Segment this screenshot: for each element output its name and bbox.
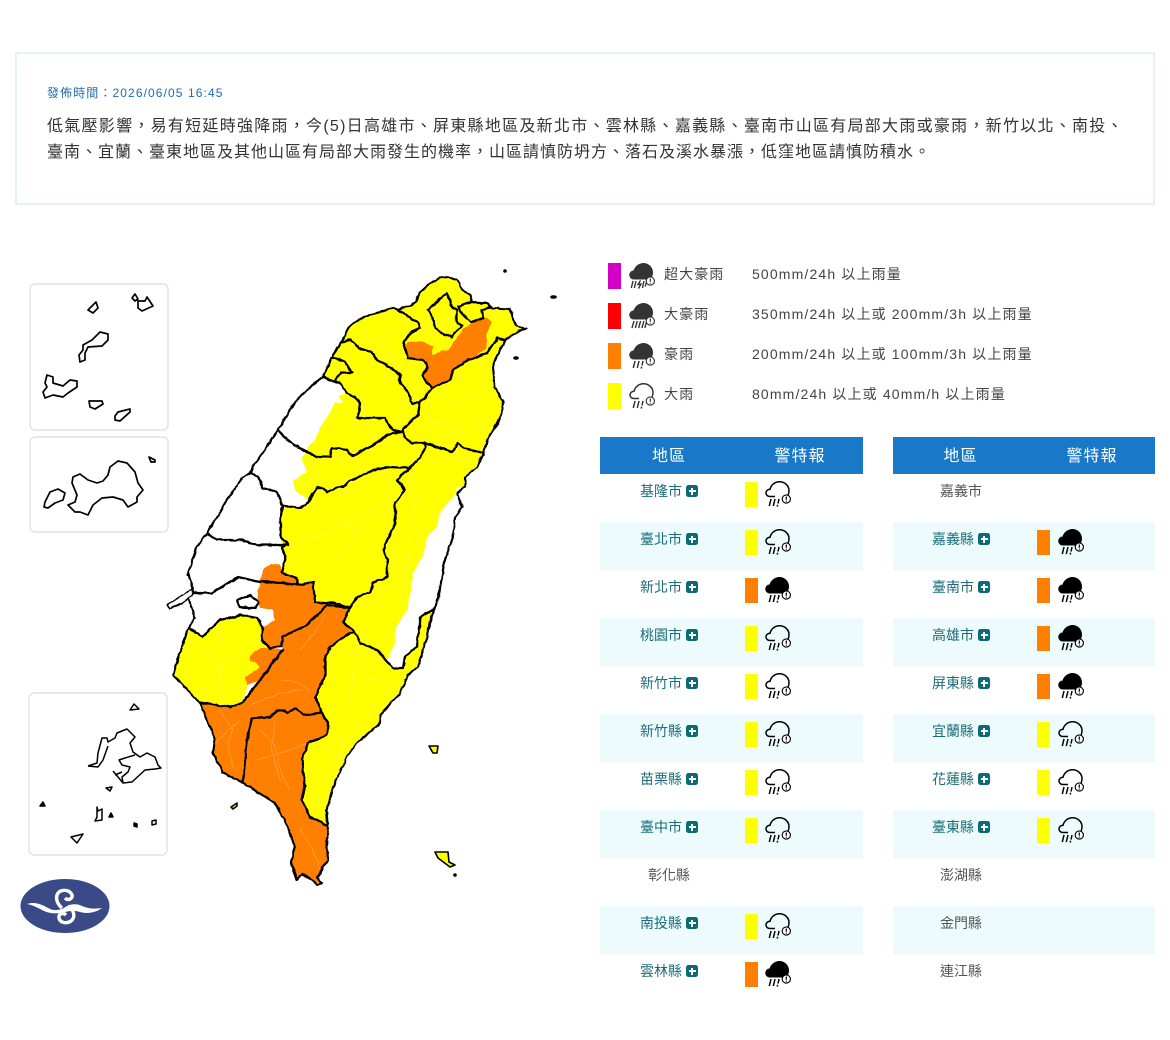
row: 連江縣: 連江縣 xyxy=(940,963,982,979)
row: 金門縣 xyxy=(893,906,1155,954)
panel: announcement box xyxy=(15,52,1155,205)
row: 新北市: 新北市 xyxy=(640,579,682,595)
table header: right: 地區 xyxy=(943,448,978,465)
row: 臺東縣: 臺東縣 xyxy=(932,819,974,835)
table header: left: 地區 xyxy=(652,448,686,465)
row: 屏東縣: 屏東縣 xyxy=(932,675,974,691)
row: 新竹縣: 新竹縣 xyxy=(640,723,682,739)
row: 臺北市 xyxy=(600,522,863,570)
row: 南投縣 xyxy=(600,906,863,954)
region: orange Tainan mountains xyxy=(245,648,283,685)
legend xyxy=(608,263,1033,409)
row: 新竹市: 新竹市 xyxy=(640,675,682,691)
legend: extremely heavy rain: 豪雨 xyxy=(664,346,694,362)
warning message text xyxy=(47,117,1124,161)
table header: left xyxy=(600,437,863,474)
warning message text: 低氣壓影響，易有短延時強降雨，今(5)日高雄市、屏東縣地區及新北市、雲林縣、嘉義縣、臺南市山區有局部大雨或豪雨，新竹以北、南投、 xyxy=(47,118,1124,135)
row: 苗栗縣: 苗栗縣 xyxy=(640,771,682,787)
row: 宜蘭縣: 宜蘭縣 xyxy=(932,723,974,739)
row: 高雄市: 高雄市 xyxy=(932,627,974,643)
row: 新竹縣 xyxy=(600,714,863,762)
legend: heavy rain xyxy=(608,383,1006,409)
region: yellow Taitung xyxy=(302,610,433,825)
table header: left: 警特報 xyxy=(774,448,826,465)
row: 臺中市: 臺中市 xyxy=(640,819,682,835)
legend: extremely torrential rain: 超大豪雨 xyxy=(664,266,724,282)
row: 花蓮縣: 花蓮縣 xyxy=(932,771,974,787)
row: 基隆市 xyxy=(640,481,791,507)
region: yellow Tainan xyxy=(173,615,270,707)
row: 嘉義市: 嘉義市 xyxy=(940,483,982,499)
legend: torrential rain: 大豪雨 xyxy=(664,306,709,322)
legend: extremely heavy rain: 200mm/24h 以上或 100mm/3h 以上雨量 xyxy=(752,346,1033,362)
map of Taiwan with insets and logo xyxy=(20,269,557,933)
row: 基隆市: 基隆市 xyxy=(640,483,682,499)
county boundaries xyxy=(188,293,505,825)
row: 新北市 xyxy=(640,577,791,603)
table: left counties xyxy=(600,481,863,987)
row: 屏東縣 xyxy=(932,673,1084,699)
row: 新竹市 xyxy=(640,673,791,699)
row: 花蓮縣 xyxy=(932,769,1084,795)
issue time: 發佈時間：2026/06/05 16:45 xyxy=(47,86,224,100)
row: 高雄市 xyxy=(893,618,1155,666)
row: 臺北市: 臺北市 xyxy=(640,531,682,547)
row: 雲林縣: 雲林縣 xyxy=(640,963,682,979)
region: orange Chiayi and Yunlin mountains xyxy=(257,564,350,648)
row: 桃園市: 桃園市 xyxy=(640,627,682,643)
row: 南投縣: 南投縣 xyxy=(640,915,682,931)
row: 金門縣: 金門縣 xyxy=(940,915,982,931)
row: 臺南市: 臺南市 xyxy=(932,579,974,595)
Taiwan coastline xyxy=(173,277,526,885)
row: 彰化縣: 彰化縣 xyxy=(648,867,690,883)
region: orange New Taipei mountains xyxy=(405,317,492,388)
legend: torrential rain xyxy=(608,303,1033,329)
Waisanding sandbar outline xyxy=(167,588,193,609)
legend: heavy rain: 大雨 xyxy=(664,386,694,402)
inset: Lienchiang outline panel xyxy=(29,693,167,855)
region: orange Kaohsiung and Pingtung xyxy=(200,605,355,885)
legend: extremely torrential rain xyxy=(608,263,902,289)
row: 雲林縣 xyxy=(640,961,791,987)
table header: right xyxy=(893,437,1155,474)
logo: Central Weather Administration xyxy=(20,879,110,933)
township lines xyxy=(190,330,490,870)
row: 澎湖縣: 澎湖縣 xyxy=(940,867,982,883)
row: 臺東縣 xyxy=(893,810,1155,858)
row: 嘉義縣: 嘉義縣 xyxy=(932,531,974,547)
row: 嘉義縣 xyxy=(893,522,1155,570)
region: yellow north and central warning area xyxy=(280,277,526,668)
inset: Kinmen outline panel xyxy=(30,437,168,532)
row: 苗栗縣 xyxy=(640,769,791,795)
land base xyxy=(173,277,526,885)
legend: extremely heavy rain xyxy=(608,343,1033,369)
inset: Matsu-Penghu outline panel xyxy=(30,284,168,430)
legend: extremely torrential rain: 500mm/24h 以上雨量 xyxy=(752,266,902,282)
warning message text: 臺南、宜蘭、臺東地區及其他山區有局部大雨發生的機率，山區請慎防坍方、落石及溪水暴漲，低窪地區請慎防積水。 xyxy=(47,144,931,161)
map: Taiwan main island xyxy=(167,277,526,885)
legend: heavy rain: 80mm/24h 以上或 40mm/h 以上雨量 xyxy=(752,386,1006,402)
legend: torrential rain: 350mm/24h 以上或 200mm/3h 以上雨量 xyxy=(752,306,1033,322)
outlying islands xyxy=(231,270,556,876)
row: 桃園市 xyxy=(600,618,863,666)
table: right counties xyxy=(893,483,1155,979)
row: 臺中市 xyxy=(600,810,863,858)
row: 臺南市 xyxy=(932,577,1084,603)
row: 宜蘭縣 xyxy=(893,714,1155,762)
table header: right: 警特報 xyxy=(1066,448,1118,465)
